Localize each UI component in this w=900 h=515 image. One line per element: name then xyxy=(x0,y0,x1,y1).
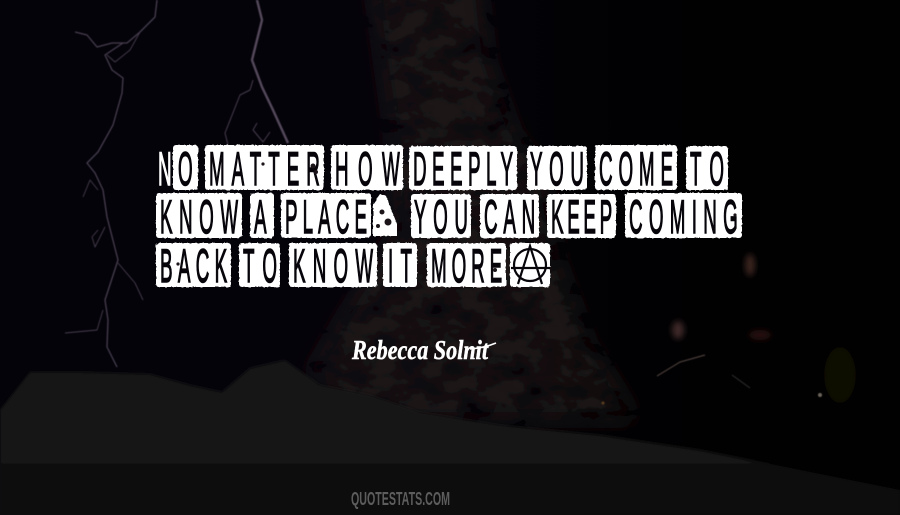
line 3 xyxy=(160,240,502,293)
line 2: YOU xyxy=(414,191,468,244)
watermark: QUOTESTATS.COM xyxy=(351,489,450,509)
line 3: MORE xyxy=(431,240,502,293)
line 2 xyxy=(160,191,738,244)
line 3: BACK xyxy=(160,240,227,293)
line 2: KEEP xyxy=(551,191,612,244)
line 1: O xyxy=(178,143,193,196)
background: lava glows xyxy=(602,254,856,404)
background: lightning bolts xyxy=(65,0,288,367)
line 2: A xyxy=(254,191,267,244)
background: cloud bank xyxy=(0,360,900,515)
line 1: MATTER xyxy=(209,143,320,196)
line 3: KNOW xyxy=(293,240,373,293)
line 2: COMING xyxy=(629,191,738,244)
word boxes xyxy=(156,145,742,287)
background: smoke plume xyxy=(310,0,640,420)
line 1: TO xyxy=(690,143,724,196)
line 3: IT xyxy=(388,240,412,293)
line 1: YOU xyxy=(530,143,584,196)
line 3: TO xyxy=(243,240,277,293)
icon: anarchy symbol xyxy=(511,246,550,284)
line 1: N xyxy=(158,143,172,196)
line 2: PLACE xyxy=(285,191,367,244)
line 1: COME xyxy=(599,143,673,196)
quote text xyxy=(156,143,742,293)
author signature: Rebecca Solnit xyxy=(351,335,489,365)
line 1 xyxy=(158,143,724,196)
line 1: HOW xyxy=(335,143,400,196)
grunge specks xyxy=(176,162,737,272)
line 2: KNOW xyxy=(160,191,238,244)
line 1: DEEPLY xyxy=(413,143,513,196)
line 2: CAN xyxy=(484,191,535,244)
